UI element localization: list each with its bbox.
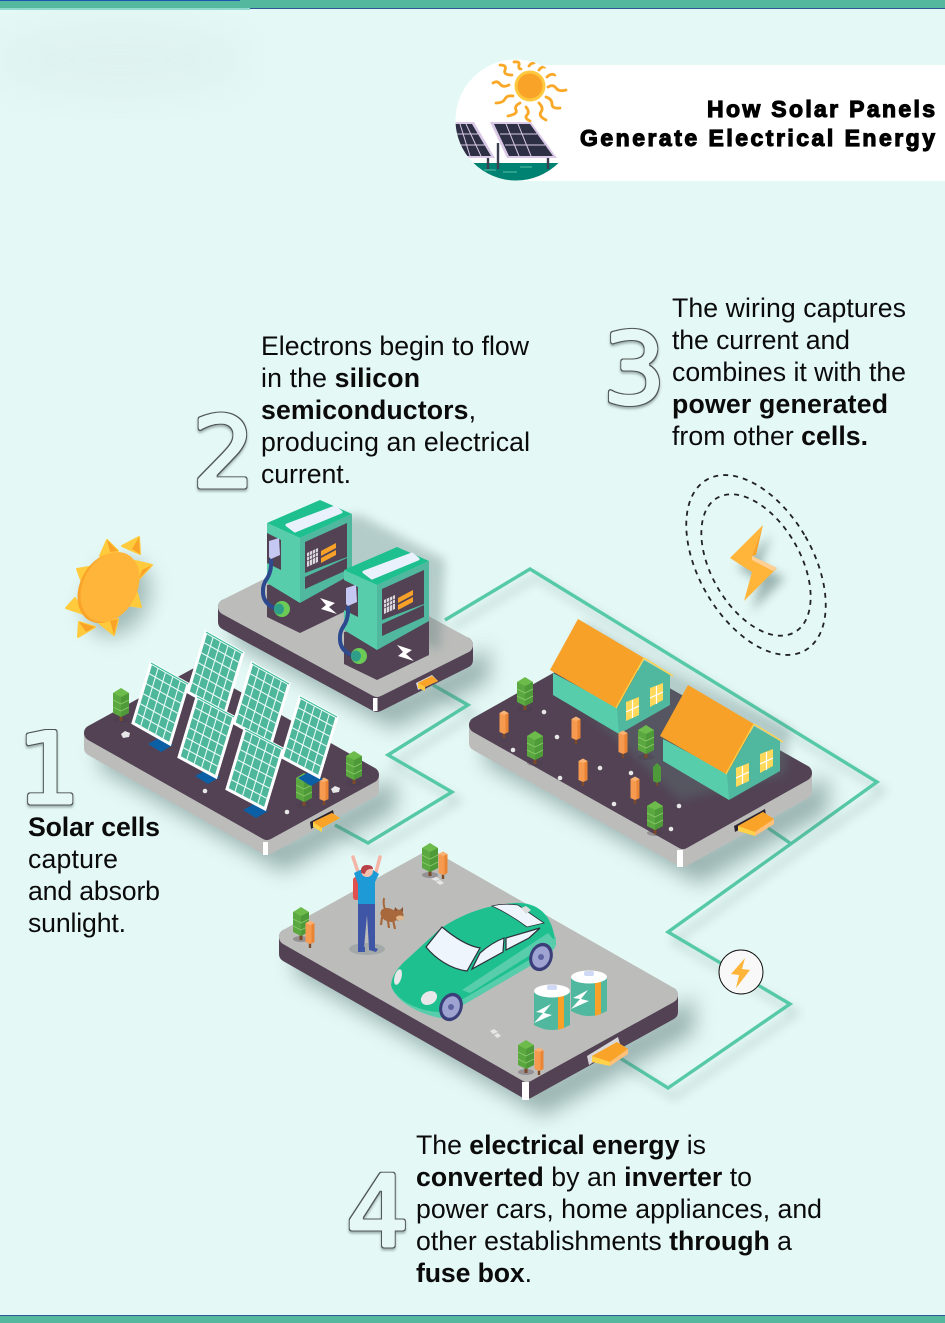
description 2: in the silicon — [261, 363, 420, 393]
description 3 — [672, 293, 906, 451]
header banner — [450, 59, 945, 183]
stands — [148, 738, 323, 818]
number 4: 4 — [346, 1156, 409, 1270]
description 2: current. — [261, 459, 351, 489]
title: Generate Electrical Energy — [580, 125, 935, 151]
solar panel — [234, 663, 289, 744]
description 4: fuse box. — [416, 1258, 532, 1288]
step 1 text — [18, 713, 160, 938]
step 3 text — [603, 293, 906, 451]
description 3: the current and — [672, 325, 850, 355]
description 4: other establishments through a — [416, 1226, 792, 1256]
icon: solar panel badge — [456, 60, 568, 180]
trees and rocks — [113, 688, 362, 814]
bottom bar — [0, 1315, 945, 1323]
panel: charging platform — [226, 500, 481, 720]
icon: sun — [66, 537, 163, 647]
person — [349, 857, 385, 955]
connector — [416, 675, 438, 691]
number 3: 3 — [603, 313, 665, 427]
solar panel — [282, 697, 337, 777]
wire: panel to charger — [335, 685, 468, 843]
description 4 — [416, 1130, 822, 1288]
panel: solar field platform — [92, 632, 387, 863]
description 4: converted by an inverter to — [416, 1162, 752, 1192]
car — [391, 903, 557, 1025]
dog — [378, 898, 404, 929]
wire shadows — [341, 577, 883, 1097]
description 3: power generated — [672, 389, 888, 419]
icon: circled lightning on wire — [719, 950, 763, 994]
number 2: 2 — [192, 397, 255, 511]
connector — [310, 810, 340, 832]
battery 1 — [534, 984, 570, 1030]
wire: house branch — [768, 828, 790, 843]
title: How Solar Panels — [707, 96, 935, 122]
description 1: and absorb — [28, 876, 160, 906]
house 1 — [550, 619, 673, 734]
description 1 — [28, 812, 160, 938]
solar panel — [179, 697, 234, 777]
wire: main circuit — [445, 569, 877, 1088]
description 2: Electrons begin to flow — [261, 331, 530, 361]
number 1: 1 — [18, 713, 80, 827]
ground dots — [511, 710, 681, 831]
battery 2 — [571, 970, 607, 1016]
solar panel — [133, 663, 188, 744]
solar panel — [188, 632, 243, 713]
description 1: capture — [28, 844, 118, 874]
description 1: sunlight. — [28, 908, 126, 938]
panel: car platform — [287, 843, 686, 1107]
connector — [734, 809, 774, 836]
description 4: The electrical energy is — [416, 1130, 706, 1160]
description 3: The wiring captures — [672, 293, 906, 323]
panel: houses platform — [477, 619, 820, 875]
description 2: semiconductors, — [261, 395, 476, 425]
title — [580, 96, 935, 151]
banner background — [516, 65, 945, 181]
description 2 — [261, 331, 530, 489]
top bar — [0, 0, 945, 10]
connector — [587, 1037, 628, 1066]
charging station 1 — [263, 500, 352, 633]
description 2: producing an electrical — [261, 427, 530, 457]
description 3: from other cells. — [672, 421, 868, 451]
trees and bollards — [293, 843, 544, 1075]
charger shadow — [300, 515, 445, 650]
house shadows — [555, 622, 790, 800]
trees and bollards — [500, 677, 663, 836]
description 4: power cars, home appliances, and — [416, 1194, 822, 1224]
solar panel — [227, 729, 283, 809]
icon: lightning with dashed rings — [657, 451, 855, 679]
description 1: Solar cells — [28, 812, 160, 842]
step 2 text — [192, 331, 530, 511]
description 3: combines it with the — [672, 357, 906, 387]
step 4 text — [346, 1130, 822, 1288]
faint background smudge — [0, 20, 250, 100]
house 2 — [660, 685, 783, 800]
charging station 2 — [340, 547, 429, 680]
